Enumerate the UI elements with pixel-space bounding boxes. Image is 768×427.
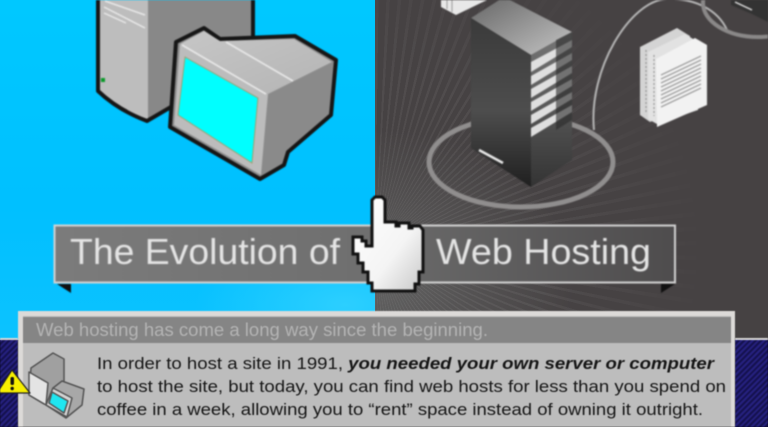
panel: navy striped footer left [0,338,18,427]
icon: small ring top right [703,0,768,37]
text block: header and intro copy: Web hosting has come a long way since the beginning. [36,320,488,340]
icon: CRT monitor [170,28,336,179]
icon: desktop tower [98,0,253,121]
icon: pointer hand cursor [353,197,423,291]
icon: document stack [640,28,707,127]
panel: message box [18,311,735,427]
arc connector [593,0,727,130]
heading: title right: Web Hosting [436,231,651,272]
header bar [23,317,731,343]
panel: navy striped footer right [735,338,768,427]
icon: rack server [471,0,572,187]
heading: title left: The Evolution of [70,231,341,272]
text block: header and intro copy: to host the site, but today, you can find web hosts for less than you spend on [97,378,726,396]
text block: header and intro copy: In order to host a site in 1991, you needed your own server or computer [97,355,716,373]
title banner [54,226,675,293]
panel: blue left background [0,0,375,340]
icon: documents top [441,0,487,15]
panel: dark right background [375,0,768,340]
icon: warning triangle [0,370,30,393]
icon: ring under server [429,117,613,207]
icon: mini computer with warning [0,352,86,420]
text block: header and intro copy: coffee in a week, allowing you to “rent” space instead of owning it outright. [97,401,703,419]
